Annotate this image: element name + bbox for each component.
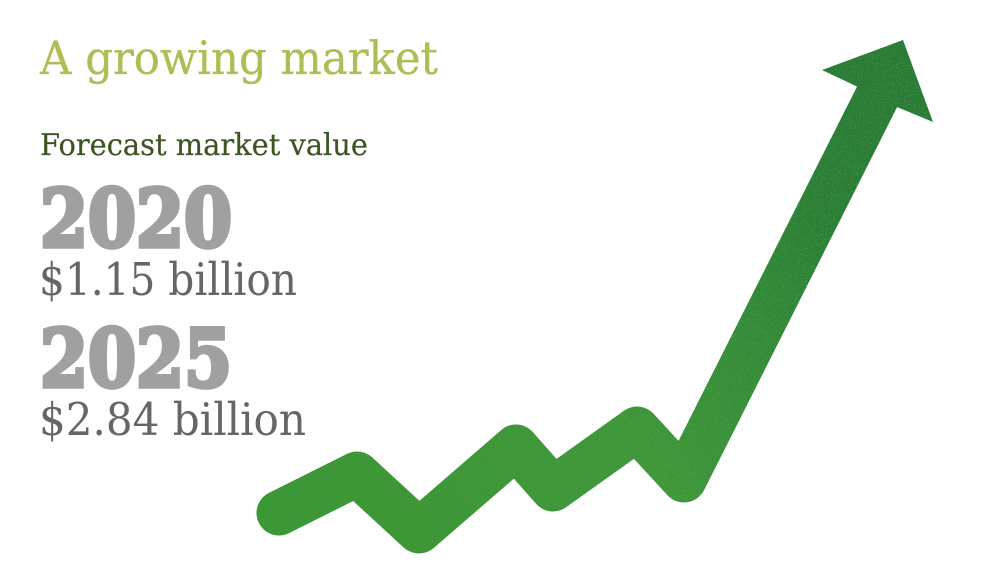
arrow shaft — [279, 97, 877, 531]
subtitle: forecast market value: Forecast market value — [40, 128, 368, 163]
arrow head — [822, 40, 933, 122]
stat: 2020 — [39, 172, 297, 306]
value 2025: $2.84 billion — [39, 393, 306, 446]
year 2020: 2020 — [40, 172, 232, 266]
stat: 2025 — [39, 312, 306, 446]
growth arrow — [279, 40, 933, 531]
texture — [512, 41, 932, 510]
title: A growing market — [39, 31, 438, 85]
year 2025: 2025 — [40, 312, 232, 406]
value 2020: $1.15 billion — [39, 253, 297, 306]
